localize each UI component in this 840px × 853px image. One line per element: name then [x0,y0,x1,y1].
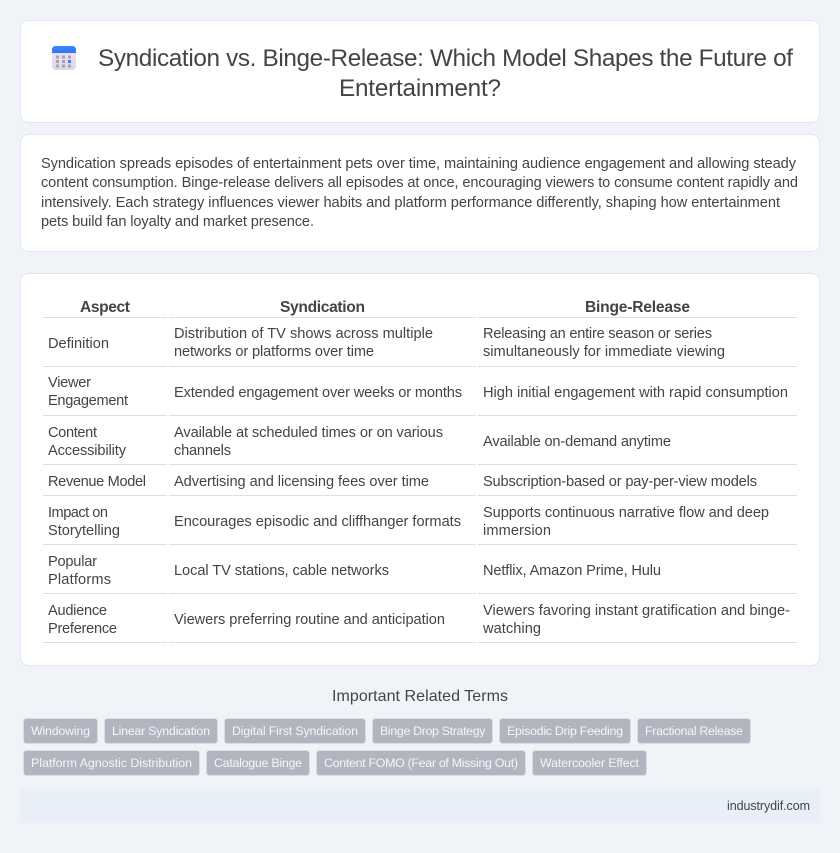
table row: impact on storytelling: Storytelling [48,523,120,539]
table row: impact on storytelling: Supports continuous narrative flow and deep [483,505,769,521]
table row: content accessibility: Content [48,425,97,441]
table header: Syndication [280,299,365,316]
panel: header [20,20,820,122]
table row: popular platforms: Local TV stations, cable networks [174,563,389,579]
tag: Watercooler Effect: Watercooler Effect [540,756,640,770]
table row: revenue model [43,474,797,496]
tag: Episodic Drip Feeding [500,718,630,744]
heading: important related terms: Important Related Terms [332,688,508,705]
table header [43,299,797,318]
table row: revenue model: Revenue Model [48,474,146,490]
tag: Fractional Release: Fractional Release [645,724,743,738]
tag: Binge Drop Strategy [372,718,492,744]
table row: impact on storytelling: Impact on [48,505,108,521]
table row: revenue model: Subscription-based or pay-per-view models [483,474,757,490]
panel: comparison table [20,274,820,666]
tag: Watercooler Effect [532,750,646,776]
tag: Binge Drop Strategy: Binge Drop Strategy [380,724,486,738]
table row: audience preference [43,603,797,643]
table row: definition [43,326,797,367]
table row: audience preference: Preference [48,621,117,637]
text block: introduction: Syndication spreads episodes of entertainment pets over time, maintaining audience engagement and allowing steady [41,156,797,172]
table row: viewer engagement: Engagement [48,393,128,409]
icon: calendar [52,46,76,70]
table row: viewer engagement [43,375,797,416]
table row: definition: Definition [48,336,109,352]
table row: definition: networks or platforms over time [174,344,374,360]
table row: definition: simultaneously for immediate viewing [483,344,725,360]
panel: introduction [20,134,820,252]
panel: related term tags [24,718,750,776]
table row: viewer engagement: Viewer [48,375,91,391]
text block: introduction: pets build fan loyalty and market presence. [41,214,314,230]
table row: viewer engagement: Extended engagement over weeks or months [174,385,462,401]
table row: content accessibility: channels [174,443,231,459]
table header: Aspect [80,299,130,316]
tag: Fractional Release [638,718,750,744]
table row: audience preference: Viewers favoring instant gratification and binge- [483,603,790,619]
table row: audience preference: Audience [48,603,107,619]
tag: Windowing: Windowing [31,724,90,738]
table row: popular platforms: Netflix, Amazon Prime, Hulu [483,563,661,579]
table row: impact on storytelling [43,505,797,545]
table header: Binge-Release [585,299,690,316]
tag: Linear Syndication: Linear Syndication [112,724,210,738]
text block: introduction [41,156,798,230]
table row: audience preference: watching [482,621,541,637]
tag: Episodic Drip Feeding: Episodic Drip Feeding [507,724,623,738]
table row: impact on storytelling: Encourages episodic and cliffhanger formats [174,514,461,530]
text block: introduction: intensively. Each strategy influences viewer habits and platform performance differently, shaping how entertainment [41,195,780,211]
title: Syndication vs. Binge-Release: Which Model Shapes the Future of [98,45,793,72]
table row: content accessibility: Accessibility [48,443,127,459]
table row: viewer engagement: High initial engagement with rapid consumption [483,385,788,401]
table row: revenue model: Advertising and licensing fees over time [174,474,429,490]
footer: industrydif.com [727,799,810,813]
table row: content accessibility: Available at scheduled times or on various [174,425,443,441]
table row: popular platforms [43,554,797,594]
tag: Digital First Syndication [224,718,366,744]
title [98,45,793,102]
table row: definition: Distribution of TV shows across multiple [174,326,433,342]
tag: Platform Agnostic Distribution: Platform Agnostic Distribution [31,756,192,770]
table row: popular platforms: Platforms [48,572,111,588]
tag: Linear Syndication [104,718,218,744]
table row: impact on storytelling: immersion [483,523,551,539]
table row: content accessibility: Available on-demand anytime [483,434,671,450]
tag: Content FOMO: Content FOMO (Fear of Missing Out) [324,756,518,770]
table row: popular platforms: Popular [48,554,97,570]
table row: audience preference: Viewers preferring routine and anticipation [174,612,445,628]
footer [20,789,820,823]
tag: Catalogue Binge [206,750,310,776]
tag: Platform Agnostic Distribution [24,750,200,776]
title: Entertainment? [339,75,501,102]
tag: Windowing [24,718,98,744]
table row: definition: Releasing an entire season or series [483,326,712,342]
tag: Content FOMO [316,750,526,776]
text block: introduction: content consumption. Binge-release delivers all episodes at once, encouraging viewers to consume content rapidly and [41,175,798,191]
tag: Catalogue Binge: Catalogue Binge [214,756,302,770]
tag: Digital First Syndication: Digital First Syndication [232,724,358,738]
table row: content accessibility [43,425,797,465]
